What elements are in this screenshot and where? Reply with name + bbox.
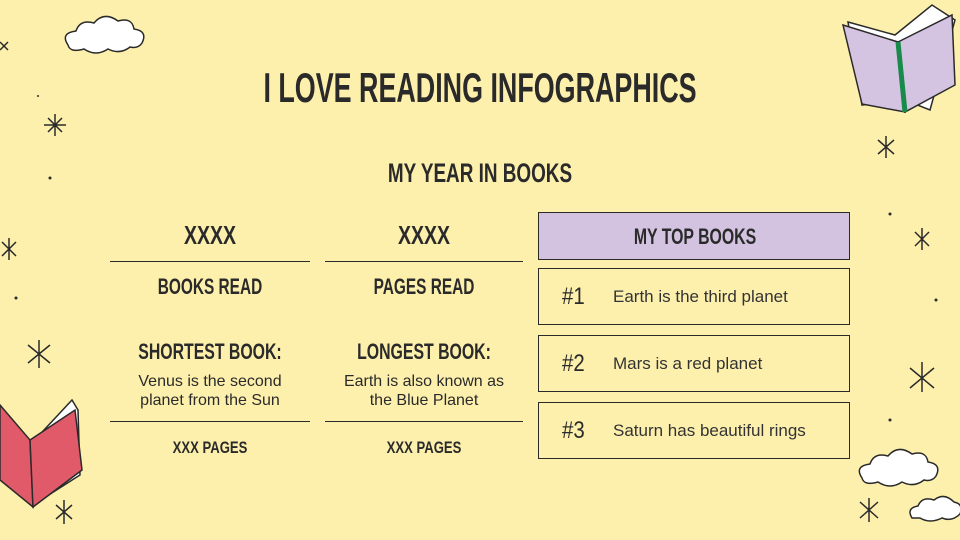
top books header: MY TOP BOOKS — [634, 224, 756, 249]
column: pages read — [325, 220, 523, 457]
top book 3 — [538, 402, 850, 459]
column: books read: SHORTEST BOOK: — [138, 339, 282, 364]
top book 1: #1 — [562, 283, 585, 310]
title: I LOVE READING INFOGRAPHICS — [263, 64, 697, 111]
top book 1: Earth is the third planet — [613, 287, 788, 306]
icon: purple book — [843, 5, 955, 112]
column: pages read: LONGEST BOOK: — [357, 339, 491, 364]
column: books read: XXX PAGES — [173, 438, 247, 457]
column: pages read: XXX PAGES — [387, 438, 461, 457]
column: books read — [110, 220, 310, 457]
top book 2 — [538, 335, 850, 392]
column: books read: BOOKS READ — [158, 274, 262, 299]
subtitle: MY YEAR IN BOOKS — [388, 158, 572, 188]
top books header — [538, 212, 850, 260]
column: pages read: PAGES READ — [374, 274, 474, 299]
top book 3: #3 — [562, 417, 585, 444]
top book 2: #2 — [562, 350, 585, 377]
column: books read: Venus is the second planet from the Sun — [138, 373, 282, 409]
column: books read: XXXX — [184, 220, 236, 250]
icon: red book — [0, 400, 82, 507]
top book 3: Saturn has beautiful rings — [613, 421, 806, 440]
column: pages read: XXXX — [398, 220, 450, 250]
top book 1 — [538, 268, 850, 325]
column: pages read: Earth is also known as the Blue Planet — [344, 373, 504, 409]
top book 2: Mars is a red planet — [613, 354, 762, 373]
